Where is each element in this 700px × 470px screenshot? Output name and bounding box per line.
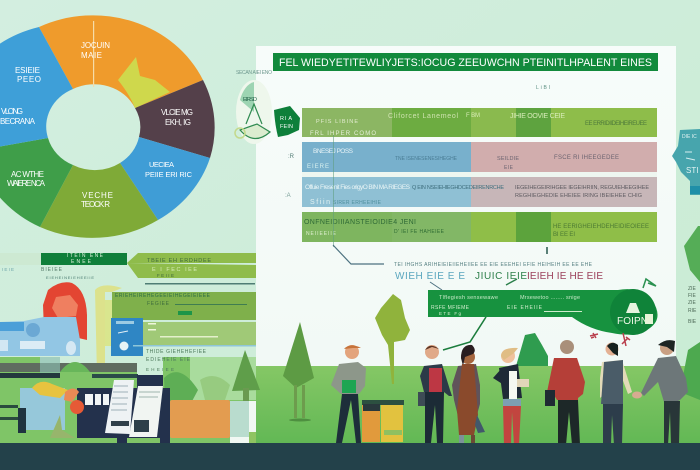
row 4: ONFNEIDIIIANSTEIOIDIE4 JENI xyxy=(304,219,416,226)
person 6 xyxy=(600,342,632,445)
segment: blue left xyxy=(0,27,73,150)
pointer line xyxy=(93,21,94,87)
row 2: EIERE xyxy=(307,164,329,170)
row 3: Offuie Fresenit Fies origyO BIN MA RIEGES xyxy=(305,184,411,191)
red sprig icons xyxy=(590,333,630,346)
row 4: HE EERIGHEIEHDEHEIDIEOIEEE xyxy=(553,224,649,230)
donut chart: PEEO xyxy=(17,75,41,84)
left section banner: EIEHEINEIEHEEIIE xyxy=(46,275,94,280)
dark panel with papers xyxy=(77,380,170,443)
row 1: F BM xyxy=(466,113,480,119)
olive label: VECHE xyxy=(82,191,113,200)
row 2 xyxy=(302,142,657,172)
segment: olive green xyxy=(40,163,158,238)
green callout with circle: FOIPN xyxy=(617,316,648,327)
row 3: Q EIN NSEIEHIEGHDCEDEIIRENRCHE xyxy=(412,185,504,191)
green data panel xyxy=(112,292,256,345)
right side shield: STI xyxy=(686,166,698,175)
pale block xyxy=(230,401,256,443)
right side foliage xyxy=(680,226,700,400)
row 3: IEGEIHEGEIRIHGEE IEGEIHRIIN, REGUIEHEEGIHEE xyxy=(515,185,649,191)
person 3 xyxy=(452,345,485,447)
row 1: PFIS LIBINE xyxy=(316,119,358,125)
note under data panel: EHEIEE xyxy=(146,367,174,372)
row 4 xyxy=(302,212,657,242)
green callout with circle: Mrsewetoo ........ snige xyxy=(520,295,580,301)
segment: blue right xyxy=(120,137,210,220)
row 4: BI EE EI xyxy=(553,232,575,238)
dark label: VLCIE MG xyxy=(161,108,193,117)
right side shield: DIE IC xyxy=(682,134,697,140)
dark machinery stripes xyxy=(0,357,163,390)
blue left lower label: VLONG xyxy=(1,107,23,116)
donut chart: WAIERE NCA xyxy=(7,179,46,188)
small grey marks: :R xyxy=(288,154,295,160)
green label: AC WTHE xyxy=(11,170,44,179)
left green ground xyxy=(0,357,256,443)
donut chart: EKH, IG xyxy=(165,118,191,127)
donut chart xyxy=(0,15,215,238)
row 1: Cliforcet Lanemeol xyxy=(388,113,458,120)
sprig icon xyxy=(643,279,656,288)
green badge: FEIN xyxy=(280,124,293,130)
vertical connector xyxy=(333,135,334,247)
pine tree xyxy=(283,322,314,388)
row 3: REGHIEGHEDIE EHEIEE IRING IBEIEHEE CHIG xyxy=(515,193,642,199)
segment: orange xyxy=(39,15,203,108)
right side note: FIE xyxy=(688,293,696,299)
note under data panel xyxy=(146,349,207,372)
row 3: SIRER ERHEEIHIE xyxy=(333,200,382,206)
stacked colourful machine xyxy=(0,382,84,438)
small scale icon and caption: SECAN AIEI ENO xyxy=(236,70,272,76)
table xyxy=(302,108,657,247)
row 2: BNESEJ POSS xyxy=(313,148,354,155)
leafy tree xyxy=(375,294,410,384)
small grey marks xyxy=(285,85,550,199)
person 4 xyxy=(493,348,529,445)
green callout with circle xyxy=(428,279,658,346)
right side note: BIE xyxy=(688,319,697,325)
caption text: WIEH EIE E E xyxy=(395,271,465,282)
left section banner: ENEE xyxy=(71,259,92,265)
green data panel: ERIEHEIREHEGEEIEIHEGEIEIEEE xyxy=(115,293,211,299)
right side shield xyxy=(672,129,700,195)
yellow wedge accent xyxy=(118,57,170,108)
right side note: RIE xyxy=(688,308,697,314)
distant green tree xyxy=(516,333,548,366)
pale ground haze xyxy=(190,357,256,400)
person 7 xyxy=(632,340,688,445)
row 4: NEIIEEIIE xyxy=(306,231,337,237)
donut chart: BECRANA xyxy=(0,117,36,126)
green badge: RI A xyxy=(280,116,292,122)
donut chart: TEOCK R xyxy=(81,200,110,209)
green callout with circle: EIE EHEIIE xyxy=(507,305,543,311)
right side note: ZIE xyxy=(688,300,696,306)
row 1: JIHIE OOVIE CEIE xyxy=(510,113,565,120)
small scale icon and caption xyxy=(235,70,272,144)
trees xyxy=(283,294,548,422)
paper left xyxy=(105,380,134,434)
row 3 xyxy=(302,172,657,207)
ground xyxy=(256,366,700,444)
caption text: TEI IHGHS ARIHEIEIEIIEHEIIEE EE EIE EEEHEI EFIE HEIHEIH EE EE EHE xyxy=(394,262,593,268)
donut chart: MAIE xyxy=(81,51,102,60)
green badge xyxy=(274,106,300,137)
segment: dark brown xyxy=(135,80,215,158)
left striped arrow bands xyxy=(127,253,256,284)
green data panel: FEGIEE xyxy=(147,301,170,307)
row 3: Sfiin xyxy=(310,199,330,206)
person 1 xyxy=(331,345,366,443)
orange label: JOCUIN xyxy=(81,41,110,50)
row 1: FRL IHPER COMO xyxy=(310,131,376,137)
caption text xyxy=(394,262,603,282)
paper right xyxy=(129,386,163,437)
small grey marks: LiBI xyxy=(536,85,550,91)
left striped arrow bands: TBEIE EH ERDHDEE xyxy=(147,258,211,264)
title banner: FEL WIEDYETITEWLIYJETS:IOCUG ZEEUWCHN PTEINITLHPALENT EINES xyxy=(279,57,652,69)
orange crate xyxy=(170,400,230,438)
left section banner: ITEIN ENE xyxy=(67,253,104,259)
connector arrows xyxy=(333,245,548,350)
yellow pillar xyxy=(95,285,122,376)
white central panel xyxy=(256,46,676,366)
small grey marks: :A xyxy=(285,193,291,199)
background trees left xyxy=(60,350,260,405)
trash bins xyxy=(362,400,404,442)
blue bus xyxy=(0,317,80,356)
row 4: D' IEI FE HAHEIEE xyxy=(394,229,445,235)
green callout with circle: Tlflegiesh sensewawe xyxy=(439,295,498,301)
title banner xyxy=(273,53,658,71)
red shape xyxy=(43,282,87,340)
left striped arrow bands: FEIIE xyxy=(157,273,174,278)
right side note: ZIE xyxy=(688,286,696,292)
row 1: EE ERRIDIIDEIHEIREUEE xyxy=(585,121,647,127)
blue info box xyxy=(111,318,256,356)
left section banner xyxy=(0,253,127,280)
green callout with circle: RSFE MFIEME xyxy=(431,305,470,311)
donut chart: PEIIE ERI RIC xyxy=(145,170,193,179)
person 5 xyxy=(545,340,585,445)
caption text: JIUIC IEIE xyxy=(475,271,527,282)
people xyxy=(331,340,688,447)
row 1 xyxy=(302,108,657,137)
callout icon xyxy=(626,303,640,313)
note under data panel: EDIEHEIE EIE xyxy=(146,357,191,363)
bottom band xyxy=(0,443,700,470)
left striped arrow bands: E I FEC IEE xyxy=(152,267,197,273)
row 2: SEILDIE xyxy=(497,156,519,162)
lighter red hexagon xyxy=(52,295,78,318)
person 2 xyxy=(418,345,452,443)
small scale icon and caption: EIRSD xyxy=(243,97,257,103)
row 2: FSCE RI IHEEGEDEE xyxy=(554,155,619,161)
right side note xyxy=(688,286,697,325)
note under data panel: THIDE GIEHEHEFIEE xyxy=(146,349,207,355)
left section banner: IEIE xyxy=(2,267,14,272)
caption text: IEIEH IE HE EIE xyxy=(527,271,603,282)
blue right label: UECIEA xyxy=(149,160,174,169)
row 2: EIE xyxy=(504,165,514,171)
blue left upper label: ESIEIE xyxy=(15,66,40,75)
left section banner: BIEIEE xyxy=(41,267,63,273)
segment: green xyxy=(0,138,73,227)
green callout with circle: ETE Fg xyxy=(439,311,461,316)
row 2: TNE ISENESENESIHEGHE xyxy=(395,156,458,162)
